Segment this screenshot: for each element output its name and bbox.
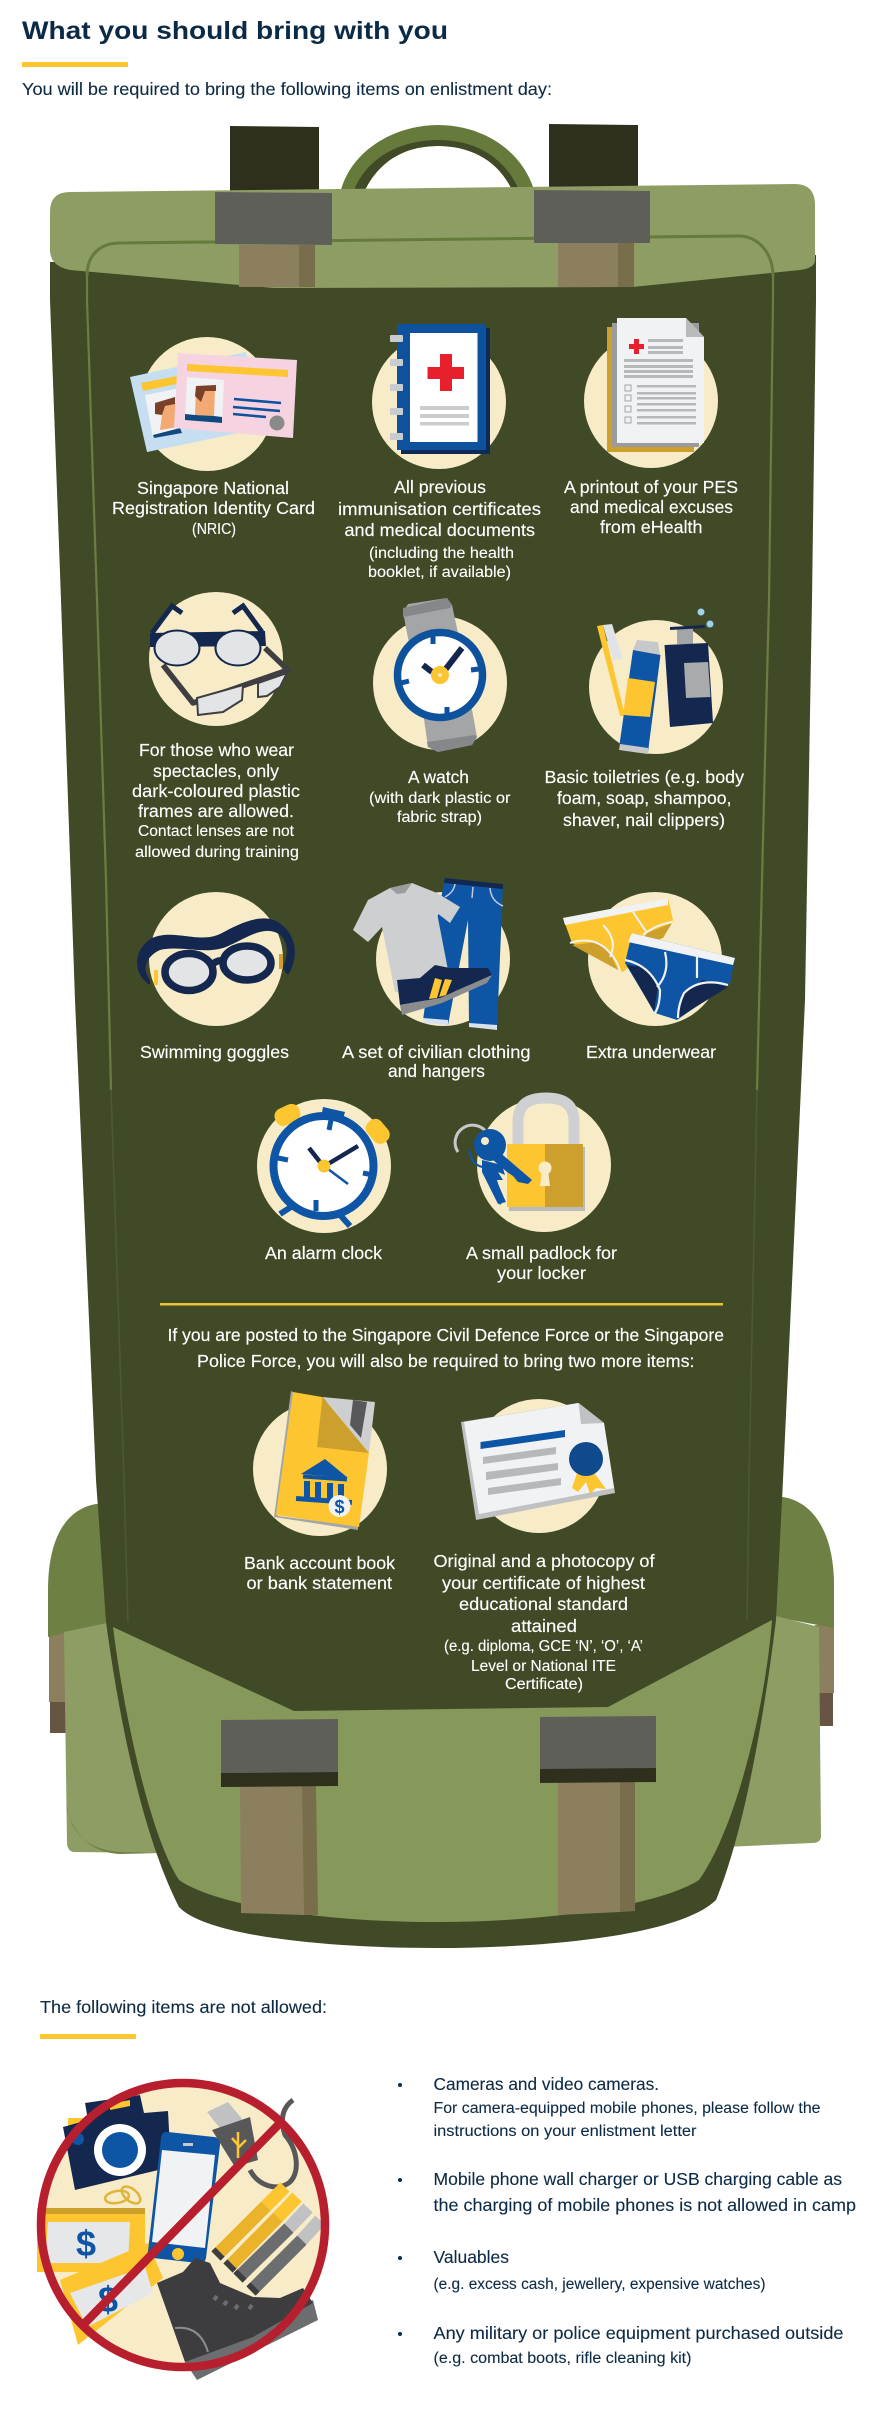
item: underwear bbox=[563, 892, 735, 1062]
icon: certificate bbox=[461, 1399, 615, 1533]
title: What you should bring with you bbox=[22, 17, 448, 45]
shoulder strap right bbox=[549, 124, 638, 191]
ammunition bbox=[216, 2187, 320, 2291]
caption: fabric strap) bbox=[397, 809, 482, 826]
combat boot bbox=[157, 2258, 318, 2380]
title underline bbox=[22, 62, 128, 67]
caption: and medical documents bbox=[344, 520, 535, 540]
caption bbox=[244, 1553, 395, 1593]
bullet: military equipment: Any military or police equipment purchased outside bbox=[434, 2323, 844, 2343]
caption bbox=[369, 767, 510, 826]
lower front pocket bbox=[113, 1620, 772, 1922]
item: padlock bbox=[455, 1098, 617, 1283]
icon: t-shirt, jeans and shoe bbox=[353, 878, 510, 1030]
caption: Singapore National bbox=[137, 478, 289, 498]
bullet: chargers: the charging of mobile phones is not allowed in camp bbox=[434, 2195, 856, 2215]
caption: An alarm clock bbox=[265, 1243, 382, 1263]
item: goggles bbox=[137, 892, 295, 1062]
top strap right bbox=[534, 190, 650, 287]
bullet: chargers: Mobile phone wall charger or USB charging cable as bbox=[434, 2169, 842, 2189]
caption: from eHealth bbox=[600, 517, 702, 537]
caption: For those who wear bbox=[139, 740, 294, 760]
caption: Extra underwear bbox=[586, 1042, 716, 1062]
item: bank book bbox=[244, 1391, 395, 1593]
wedding rings bbox=[104, 2183, 143, 2207]
item: watch bbox=[369, 598, 510, 826]
caption bbox=[564, 477, 738, 537]
intro text: You will be required to bring the following items on enlistment day: bbox=[22, 79, 552, 99]
caption: dark-coloured plastic bbox=[132, 781, 300, 801]
item: toiletries bbox=[544, 608, 744, 830]
caption: educational standard bbox=[459, 1594, 628, 1614]
top flap bbox=[50, 184, 815, 288]
caption: your certificate of highest bbox=[442, 1573, 645, 1593]
right side pocket bbox=[725, 1497, 834, 1847]
bullet: valuables: (e.g. excess cash, jewellery, expensive watches) bbox=[434, 2276, 766, 2293]
caption: Basic toiletries (e.g. body bbox=[544, 767, 744, 787]
front bill: $ bbox=[98, 2279, 118, 2320]
caption bbox=[466, 1243, 617, 1283]
caption: your locker bbox=[497, 1263, 586, 1283]
item: spectacles bbox=[132, 592, 300, 861]
heading: items not allowed: The following items are not allowed: bbox=[40, 1997, 327, 2017]
caption: and medical excuses bbox=[570, 497, 733, 517]
caption: A printout of your PES bbox=[564, 477, 738, 497]
backpack illustration bbox=[48, 124, 834, 1948]
caption: All previous bbox=[394, 477, 486, 497]
icon: bank book bbox=[253, 1391, 387, 1536]
icon: two pairs of glasses bbox=[149, 592, 288, 726]
item: NRIC bbox=[112, 337, 315, 538]
caption: Level or National ITE bbox=[471, 1658, 616, 1675]
caption bbox=[342, 1042, 530, 1081]
phone bbox=[148, 2132, 220, 2263]
heading underline bbox=[40, 2034, 136, 2039]
caption: Swimming goggles bbox=[140, 1042, 289, 1062]
backpack main body bbox=[50, 255, 816, 1948]
caption: Registration Identity Card bbox=[112, 498, 315, 518]
icon: printed document bbox=[584, 318, 718, 468]
item: PES printout bbox=[564, 318, 738, 537]
lower strap right bbox=[540, 1716, 656, 1915]
caption: frames are allowed. bbox=[138, 801, 294, 821]
prohibition sign bbox=[41, 2083, 325, 2367]
bullet: cameras bbox=[398, 2074, 820, 2140]
caption bbox=[434, 1551, 655, 1693]
camera bbox=[63, 2095, 171, 2190]
caption: immunisation certificates bbox=[338, 499, 541, 519]
shoulder strap left bbox=[230, 126, 319, 193]
caption bbox=[544, 767, 744, 830]
caption: Bank account book bbox=[244, 1553, 395, 1573]
caption: foam, soap, shampoo, bbox=[557, 788, 732, 808]
bullet: valuables bbox=[398, 2247, 766, 2293]
notice: posted to SCDF or SPF bbox=[168, 1325, 724, 1371]
bullet: cameras: For camera-equipped mobile phones, please follow the bbox=[434, 2100, 820, 2117]
caption: spectacles, only bbox=[153, 761, 279, 781]
bullet: cameras: Cameras and video cameras. bbox=[434, 2074, 659, 2094]
backpack handle bbox=[341, 125, 534, 190]
icon: padlock and keys bbox=[455, 1098, 611, 1232]
bullet: cameras: instructions on your enlistment letter bbox=[434, 2123, 696, 2140]
caption bbox=[112, 478, 315, 538]
front bill bbox=[60, 2243, 163, 2345]
back bill: $ bbox=[76, 2223, 96, 2264]
caption: A set of civilian clothing bbox=[342, 1042, 530, 1062]
bullet: chargers bbox=[398, 2169, 856, 2215]
notice: posted to SCDF or SPF: If you are posted to the Singapore Civil Defence Force or the Singapore bbox=[168, 1325, 724, 1345]
lower strap left bbox=[221, 1719, 338, 1915]
caption: and hangers bbox=[388, 1061, 485, 1081]
caption: Original and a photocopy of bbox=[434, 1551, 655, 1571]
item: medical documents bbox=[338, 324, 541, 581]
top strap left bbox=[215, 192, 332, 287]
caption: shaver, nail clippers) bbox=[563, 810, 725, 830]
icon: swimming goggles bbox=[137, 892, 295, 1026]
caption: (with dark plastic or bbox=[369, 790, 510, 807]
caption: or bank statement bbox=[246, 1573, 392, 1593]
zipper line bbox=[757, 275, 773, 1090]
icon: identity cards bbox=[130, 337, 297, 471]
back bill bbox=[37, 2208, 145, 2272]
caption: (e.g. diploma, GCE ‘N’, ‘O’, ‘A’ bbox=[444, 1638, 643, 1655]
icon: wristwatch bbox=[373, 598, 507, 752]
bullet: military equipment: (e.g. combat boots, rifle cleaning kit) bbox=[434, 2350, 692, 2367]
list: items not allowed bbox=[398, 2074, 856, 2367]
zipper line left bbox=[87, 275, 111, 1090]
caption: A watch bbox=[408, 767, 469, 787]
icon: prohibited items bbox=[37, 2083, 325, 2380]
item: certificate bbox=[434, 1399, 655, 1693]
icon: bank book: $ bbox=[334, 1497, 345, 1517]
caption: (NRIC) bbox=[192, 521, 236, 538]
bullet: valuables: Valuables bbox=[434, 2247, 509, 2267]
item: alarm clock bbox=[257, 1099, 393, 1263]
bullet: military equipment bbox=[398, 2323, 844, 2367]
left side pocket bbox=[48, 1504, 160, 1854]
icon: medical notebook bbox=[372, 324, 506, 469]
zipper line lower bbox=[111, 1090, 757, 1622]
icon: alarm clock bbox=[257, 1099, 393, 1233]
caption: (including the health bbox=[369, 545, 514, 562]
icon: two briefs bbox=[563, 892, 735, 1026]
caption: Certificate) bbox=[505, 1676, 583, 1693]
caption: A small padlock for bbox=[466, 1243, 617, 1263]
notice: posted to SCDF or SPF: Police Force, you will also be required to bring two more items: bbox=[197, 1351, 694, 1371]
caption: allowed during training bbox=[135, 844, 299, 861]
flap seam bbox=[87, 236, 773, 276]
icon: toothbrush, tube and bottle bbox=[589, 608, 723, 754]
caption: booklet, if available) bbox=[368, 564, 511, 581]
caption bbox=[338, 477, 541, 581]
usb cable bbox=[207, 2100, 296, 2187]
caption: attained bbox=[511, 1616, 577, 1636]
caption: Contact lenses are not bbox=[138, 823, 295, 840]
caption bbox=[132, 740, 300, 861]
item: clothing bbox=[342, 878, 530, 1081]
